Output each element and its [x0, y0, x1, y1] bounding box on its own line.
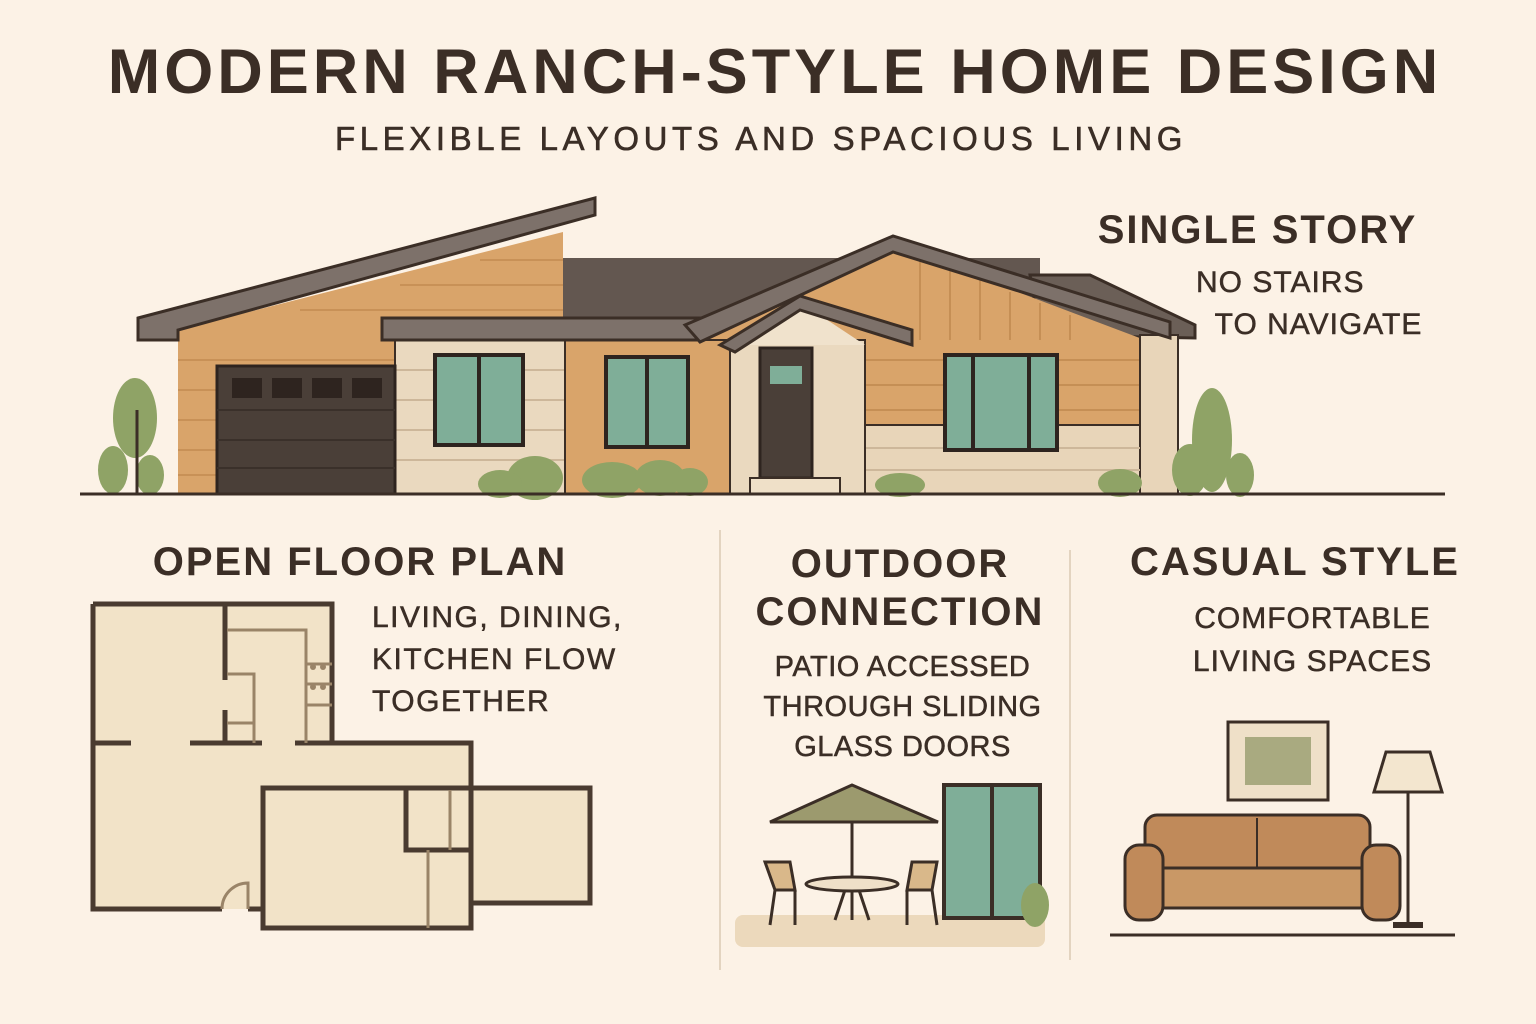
heading: outdoor connection: [756, 542, 1044, 634]
subtitle: FLEXIBLE LAYOUTS AND SPACIOUS LIVING: [335, 120, 1187, 157]
text: patio: PATIO ACCESSED: [775, 651, 1030, 683]
text: living dining: TOGETHER: [372, 685, 550, 718]
heading: open floor plan: OPEN FLOOR PLAN: [153, 540, 567, 584]
text: no stairs: [1196, 266, 1422, 341]
text: patio: THROUGH SLIDING: [763, 691, 1042, 723]
text: living dining: LIVING, DINING,: [372, 601, 623, 634]
text: living dining: [372, 601, 623, 718]
text: comfortable: [1193, 602, 1432, 678]
text: living dining: KITCHEN FLOW: [372, 643, 617, 676]
title: MODERN RANCH-STYLE HOME DESIGN: [108, 37, 1442, 107]
heading: single story: SINGLE STORY: [1098, 208, 1417, 252]
text: no stairs: TO NAVIGATE: [1215, 308, 1422, 341]
heading: outdoor connection: OUTDOOR: [791, 542, 1009, 586]
text: comfortable: LIVING SPACES: [1193, 645, 1432, 678]
text: patio: [763, 651, 1042, 763]
text: no stairs: NO STAIRS: [1196, 266, 1364, 299]
text: comfortable: COMFORTABLE: [1194, 602, 1431, 635]
text: patio: GLASS DOORS: [794, 731, 1011, 763]
heading: outdoor connection: CONNECTION: [756, 590, 1044, 634]
heading: casual style: CASUAL STYLE: [1130, 540, 1460, 584]
